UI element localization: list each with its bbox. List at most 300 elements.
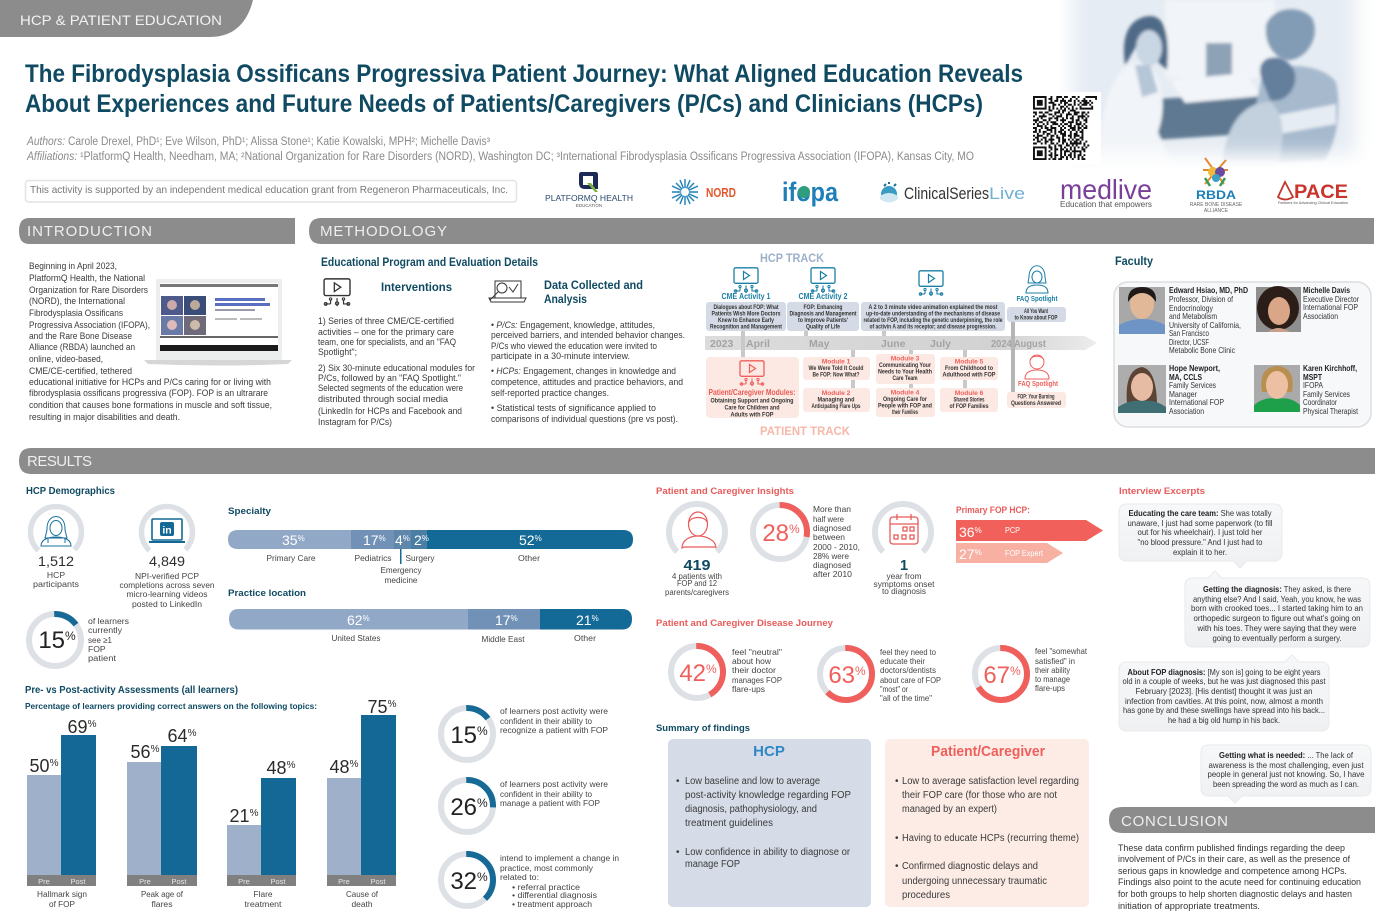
timeline arrow — [705, 336, 1097, 350]
box: video animation: of activin A and its receptor; and disease progression. — [870, 324, 997, 330]
text: Edward Hsiao: Metabolic Bone Clinic — [1169, 346, 1235, 355]
icon: laptop showing webinar — [144, 279, 292, 366]
stat: 26% confident manage: manage a patient with FOP — [500, 798, 600, 808]
box: module 4: their Families — [892, 409, 918, 416]
heading: pre vs post: Percentage of learners providing correct answers on the following topics: — [25, 701, 317, 711]
panel: summary patient caregiver: Having to educate HCPs (recurring theme) — [902, 833, 1079, 844]
box: module 1 — [803, 357, 870, 380]
logo: PACE: PACE — [1294, 182, 1348, 203]
stat: 67% somewhat satisfied: 67 — [983, 662, 1010, 689]
group: cause of death: % — [350, 759, 359, 770]
icon: animation video — [919, 271, 943, 296]
stat: 28% diagnosed after 2010: half were — [813, 514, 844, 524]
logo: RBDA — [1190, 158, 1243, 214]
box: module 6: Shared Stories — [954, 396, 985, 404]
text: Edward Hsiao: Endocrinology — [1169, 304, 1214, 313]
month labels: June — [881, 338, 906, 350]
stat: 15% currently see FOP: see ≥1 — [88, 635, 112, 645]
icon: doctor — [41, 516, 71, 546]
stat: 26% confident manage — [441, 779, 608, 832]
bar chart: specialty: 2 — [414, 532, 422, 548]
bar chart: practice location: % — [363, 614, 370, 623]
top tab: HCP & Patient Education — [0, 0, 253, 37]
box: FAQ HCP — [1007, 307, 1066, 322]
box: module 5: Adulthood with FOP — [942, 372, 996, 378]
stat: 1 year to diagnosis: to diagnosis — [882, 586, 926, 596]
quote bubble: getting the diagnosis: with his toes. They were saying that they were — [1197, 623, 1357, 633]
quote bubble: getting what is needed — [1201, 745, 1371, 803]
bar chart: practice location: 21 — [576, 612, 592, 628]
group: peak age: Pre — [139, 877, 151, 886]
heading: data collected — [544, 280, 643, 306]
panel: summary patient caregiver: • — [895, 861, 899, 872]
authors and affiliations — [26, 136, 974, 163]
text: Hope Newport: Family Services — [1169, 381, 1216, 390]
stat: 63% educate doctors: educate their — [880, 656, 925, 666]
stat: 28% diagnosed after 2010: 2000 - 2010, — [813, 542, 860, 552]
group: hallmark sign: Hallmark sign — [37, 889, 87, 899]
group: hallmark sign: Pre — [38, 877, 50, 886]
text: Hope Newport: International FOP — [1169, 398, 1224, 407]
text: Karen Kirchhoff: IFOPA — [1303, 381, 1323, 390]
box: module 5: From Childhood to — [945, 365, 993, 372]
stat: 15% currently see FOP — [29, 614, 129, 666]
heading: interview excerpts: Interview Excerpts — [1119, 486, 1205, 497]
arrow: 27% FOP expert: 27 — [959, 546, 975, 562]
quote bubble: educating the care team: out for his wheelchair). I just told her — [1138, 527, 1263, 537]
stat: 67% somewhat satisfied — [975, 646, 1088, 700]
logo: ClinicalSeriesLive: ClinicalSeries — [904, 185, 989, 203]
quote bubble: getting what is needed: awareness is the most challenging, even just — [1208, 760, 1364, 770]
text: Edward Hsiao: and Metabolism — [1169, 312, 1217, 321]
stat: 63% educate doctors — [820, 647, 941, 703]
text block: conclusion: involvement of P/Cs in their care, as well as the presence of — [1118, 854, 1350, 865]
month labels: July — [930, 338, 951, 350]
text block: introduction: (NORD), the International — [29, 296, 125, 306]
panel: summary patient caregiver: Low to average satisfaction level regarding — [902, 776, 1079, 787]
panel: summary HCP: Low confidence in ability to diagnose or — [685, 847, 851, 858]
bar chart: practice location: Middle East — [482, 634, 525, 644]
stat: HCP participants — [20, 496, 92, 589]
stat: 67% somewhat satisfied: feel "somewhat — [1035, 646, 1088, 656]
text: Edward Hsiao — [1169, 285, 1248, 355]
text block: data collected: • Statistical tests of significance applied to — [491, 403, 656, 413]
box: module 4: Module 4 — [891, 390, 920, 396]
bar chart: specialty: % — [379, 534, 386, 543]
text block: data collected: P/Cs who viewed the education were invited to — [491, 341, 657, 351]
stat: 419 patients and caregivers: 4 patients with — [672, 571, 722, 581]
stat: 42% neutral — [671, 646, 782, 698]
box: module 2 — [803, 388, 870, 412]
group: peak age: % — [188, 728, 197, 739]
stat: 419 patients and caregivers: 419 — [684, 558, 710, 574]
arrow: 36% PCP: 36 — [959, 524, 975, 540]
box: CME 1: Patients Wish More Doctors — [712, 310, 781, 318]
stat: 42% neutral: their doctor — [732, 665, 776, 675]
box: CME 2: Diagnosis and Management — [790, 310, 857, 318]
quote bubble: educating the care team: unaware, I just had some paperwork (to fill — [1128, 518, 1273, 528]
text: Edward Hsiao: Professor, Division of — [1169, 295, 1234, 304]
arrow: 36% PCP: % — [975, 526, 982, 535]
heading: specialty: Specialty — [228, 506, 272, 517]
bar chart: specialty: Primary Care — [266, 553, 316, 563]
text block: introduction: Fibrodysplasia Ossificans — [29, 308, 123, 318]
text block: interventions: 1) Series of three CME/CE-certified — [318, 316, 454, 326]
box: module 3: Communicating Your — [879, 362, 931, 369]
heading: pre vs post — [25, 685, 317, 711]
icon: video interventions — [324, 279, 350, 306]
text block: conclusion: initiation of appropriate treatments. — [1118, 901, 1260, 912]
stat: 15% currently see FOP: currently — [88, 625, 123, 635]
box: FAQ patient: Questions Answered — [1011, 400, 1061, 407]
logo: PlatformQ Health: EDUCATION — [576, 203, 602, 208]
box: module 4: People with FOP and — [878, 402, 932, 410]
box: FAQ patient — [1007, 392, 1066, 408]
stat: 419 patients and caregivers: FOP and 12 — [677, 578, 717, 588]
group: hallmark sign: % — [88, 719, 97, 730]
group: peak age: 64 — [168, 726, 188, 746]
box: module 1: Be FOP: Now What? — [812, 372, 860, 378]
icon: FAQ patient — [1025, 355, 1049, 379]
bar chart: specialty: 35 — [282, 532, 298, 548]
text block: introduction: Organization for Rare Disorders — [29, 285, 148, 295]
group: peak age: Post — [171, 877, 187, 886]
text: Michelle Davis: Michelle Davis — [1303, 285, 1350, 295]
text block: data collected: competence, attitudes and practice behaviors, and — [491, 377, 683, 387]
bar chart: specialty: 52 — [519, 532, 535, 548]
stat: 32% intend to change: • differential diagnosis — [512, 890, 597, 900]
quote bubble: getting the diagnosis: going to eventually perform a surgery. — [1212, 633, 1342, 643]
quote bubble: educating the care team: "no blood pressure." And I just had to — [1138, 537, 1263, 547]
panel: summary patient caregiver: Confirmed diagnostic delays and — [902, 861, 1038, 872]
logo: RBDA: RARE BONE DISEASE — [1190, 202, 1243, 208]
stat: 28% diagnosed after 2010: diagnosed — [813, 523, 851, 533]
stat: LinkedIn completions: completions across seven — [120, 580, 215, 590]
box: CME 2: FOP: Enhancing — [804, 304, 843, 311]
stat: HCP participants: HCP — [47, 570, 65, 580]
heading: FAQ Spotlight patient: FAQ Spotlight — [1018, 381, 1059, 388]
quote bubble: about FOP diagnosis: old in a couple of weeks, but he was just diagnosed this past — [1122, 676, 1326, 686]
heading: interventions: Interventions — [381, 282, 452, 294]
quote bubble: getting what is needed: people in general just not knowing. So, I have — [1208, 769, 1365, 779]
logo: medlive: Education that empowers — [1060, 200, 1152, 209]
box: module 2: Managing and — [818, 396, 855, 404]
stat: 32% intend to change: 32 — [450, 868, 477, 895]
bar chart: practice location: 17 — [495, 612, 511, 628]
panel: summary HCP: HCP — [753, 743, 785, 760]
heading: data collected: Data Collected and — [544, 280, 643, 292]
stat: 15% currently see FOP: % — [65, 629, 76, 643]
group: hallmark sign: Post — [70, 877, 86, 886]
month labels: 2024 August — [991, 338, 1046, 350]
text block: interventions: Spotlight"; — [318, 347, 357, 357]
text block: interventions: 2) Six 30-minute educational modules for — [318, 363, 475, 373]
stat: 15% confident recognize: recognize a patient with FOP — [500, 725, 608, 735]
box: module 3: Module 3 — [891, 356, 920, 362]
stat: 28% diagnosed after 2010: 28% were — [813, 551, 849, 561]
bar chart: specialty: 4 — [395, 532, 403, 548]
group: cause of death: Pre — [338, 877, 350, 886]
stat: LinkedIn completions — [120, 496, 215, 609]
quote bubble: educating the care team: explain it to her. — [1173, 547, 1227, 557]
box: module 3: Needs to Your Health — [878, 368, 932, 376]
photo: Edward Hsiao — [1119, 287, 1165, 334]
box: CME 1: Knew to Enhance Early — [718, 317, 774, 324]
text block: conclusion: serious gaps in knowledge and competence among HCPs. — [1118, 866, 1347, 877]
text block: data collected: self-reported practice changes. — [491, 388, 609, 398]
text block: introduction: CME/CE-certified, tethered — [29, 366, 132, 376]
box: video animation: related to FOP, including the genetic underpinning, the role — [864, 317, 1003, 324]
month labels: April — [746, 338, 770, 350]
box: module 4: Ongoing Care for — [883, 396, 927, 403]
panel: summary HCP: Low baseline and low to average — [685, 776, 820, 787]
icon: LinkedIn laptop: in — [162, 524, 172, 536]
box: module 2: Anticipating Flare Ups — [812, 403, 861, 410]
panel: summary patient caregiver: • — [895, 833, 899, 844]
section bar: Methodology: METHODOLOGY — [320, 223, 448, 240]
text block: introduction — [29, 261, 272, 422]
stat: 67% somewhat satisfied: their ability — [1035, 665, 1071, 675]
bar chart: practice location: % — [592, 614, 599, 623]
title: The Fibrodysplasia Ossificans Progressiva Patient Journey: What Aligned Education Reveals — [25, 60, 1023, 88]
bar chart: specialty: % — [298, 534, 305, 543]
QR code — [1033, 92, 1101, 160]
box: patient caregiver modules: Obtaining Support and Ongoing — [710, 398, 794, 404]
bar chart: specialty: % — [422, 534, 429, 543]
text block: introduction: online, video-based, — [29, 354, 103, 364]
group: peak age: Peak age of — [141, 889, 184, 899]
group: cause of death: Post — [370, 877, 386, 886]
text: Hope Newport — [1169, 363, 1224, 416]
box: module 6: Module 6 — [955, 390, 984, 397]
stat: LinkedIn completions: NPI-verified PCP — [135, 571, 199, 581]
stat: 32% intend to change — [441, 853, 619, 909]
box: CME 1: Dialogues about FOP: What — [714, 304, 779, 311]
logo: IFOPA: ifopa — [782, 177, 839, 207]
stat: 63% educate doctors: doctors/dentists — [880, 665, 936, 675]
heading: CME Activity 1: CME Activity 1 — [722, 291, 771, 301]
quote bubble: about FOP diagnosis: About FOP diagnosis: [My son is] going to be eight years — [1128, 667, 1320, 677]
group: hallmark sign: % — [50, 758, 59, 769]
text block: interventions: activities – one for the primary care — [318, 327, 454, 337]
icon: FAQ doctor — [1026, 266, 1048, 293]
stat: 15% confident recognize: % — [477, 724, 488, 738]
bar chart: specialty — [228, 530, 633, 585]
group: flare treatment: % — [287, 760, 296, 771]
logo: PlatformQ Health — [545, 172, 633, 208]
month labels: 2023 — [710, 338, 734, 350]
stat: 32% intend to change: • treatment approach — [512, 899, 592, 909]
panel: summary patient caregiver: • — [895, 776, 899, 787]
text: Edward Hsiao: Edward Hsiao, MD, PhD — [1169, 285, 1248, 295]
month labels — [710, 338, 1046, 350]
box: video animation — [861, 302, 1005, 331]
box: CME 1: Recognition and Management — [710, 324, 783, 330]
stat: HCP participants: 1,512 — [38, 553, 74, 569]
box: module 5: Module 5 — [955, 358, 984, 366]
bar chart: practice location: 62 — [347, 612, 363, 628]
section bar: Introduction: INTRODUCTION — [27, 223, 153, 240]
arrow: 27% FOP expert — [956, 543, 1063, 563]
box: CME 2: Quality of Life — [806, 324, 840, 330]
box: module 3 — [876, 354, 935, 384]
quote bubble: getting the diagnosis: orthopedic surgeon to figure out what's going on — [1194, 613, 1361, 623]
section bar: Methodology — [309, 218, 1374, 244]
group: hallmark sign: 50 — [30, 756, 50, 776]
quote bubble: getting what is needed: Getting what is needed: ... The lack of — [1219, 750, 1354, 760]
panel: summary patient caregiver: procedures — [902, 890, 950, 901]
stat: 28% diagnosed after 2010: % — [789, 522, 800, 536]
group: cause of death: Cause of — [346, 889, 379, 899]
text block: interventions — [318, 316, 475, 427]
section bar: Results — [19, 448, 1375, 474]
group: flare treatment: Flare — [254, 889, 273, 899]
logo: PACE — [1278, 182, 1348, 205]
text block: data collected: participate in a 30-minute interview. — [491, 351, 630, 361]
bar chart: pre vs post assessments — [27, 697, 397, 909]
section bar: Conclusion — [1109, 807, 1375, 833]
arrow: 27% FOP expert: % — [975, 548, 982, 557]
quote bubble: getting the diagnosis: born with crooked toes... I started taking him to an — [1191, 603, 1363, 613]
group: flare treatment: treatment — [244, 899, 282, 909]
panel: summary patient caregiver: managed by an expert) — [902, 804, 997, 815]
heading: primary FOP HCP: Primary FOP HCP: — [956, 505, 1030, 515]
group: peak age: 56 — [131, 742, 151, 762]
box: module 3: Care Team — [892, 375, 918, 382]
quote bubble: getting the diagnosis: Getting the diagnosis: They asked, is there — [1203, 584, 1351, 594]
heading: disease journey: Patient and Caregiver Disease Journey — [656, 618, 834, 629]
stat: 15% currently see FOP: patient — [88, 653, 117, 663]
box: module 6: of FOP Families — [950, 403, 989, 410]
bar chart: practice location: % — [511, 614, 518, 623]
panel: summary patient caregiver — [885, 739, 1089, 907]
stat: 32% intend to change: related to: — [500, 872, 539, 882]
panel: summary patient caregiver: Patient/Caregiver — [931, 743, 1045, 760]
group: peak age: flares — [152, 899, 172, 909]
text block: conclusion: These data confirm published findings regarding the deep — [1118, 843, 1345, 854]
text: Michelle Davis: Association — [1303, 312, 1338, 321]
box: patient caregiver modules: Care for Children and — [724, 404, 780, 412]
text block: conclusion — [1118, 843, 1361, 912]
bar chart: specialty: Other — [518, 553, 540, 563]
group: flare treatment: 21 — [230, 806, 250, 826]
box: video animation: up-to-date understanding of the mechanisms of disease — [866, 310, 1000, 318]
group: peak age — [127, 726, 197, 909]
stat: LinkedIn completions: micro-learning videos — [126, 589, 208, 599]
text block: interventions: team, one for specialists, and an "FAQ — [318, 337, 456, 347]
bar chart: practice location: United States — [332, 633, 380, 643]
panel: summary HCP: • — [676, 776, 680, 787]
group: flare treatment — [227, 758, 296, 909]
top tab: HCP & Patient Education: HCP & PATIENT EDUCATION — [20, 12, 222, 28]
heading: FAQ Spotlight HCP: FAQ Spotlight — [1016, 296, 1058, 303]
authors and affiliations: Affiliations: ¹PlatformQ Health, Needham, MA; ²National Organization for Rare Disorders (NORD), Washington DC; ³International Fibrodysplasia Ossificans Progressiva Association (IFOPA), Kansas City, MO — [26, 151, 974, 163]
box: CME 1 — [706, 302, 786, 331]
text block: conclusion: for both groups to help shorten diagnostic delays and hasten — [1118, 889, 1352, 900]
stat: 42% neutral: 42 — [679, 660, 706, 687]
text block: conclusion: Findings also point to the acute need for continuing education — [1118, 877, 1361, 888]
logo: RBDA: ALLIANCE — [1204, 208, 1229, 214]
text block: introduction: condition that causes bone formations in muscle and soft tissue, — [29, 400, 272, 410]
panel: summary HCP: treatment guidelines — [685, 818, 773, 829]
text block: interventions: P/Cs, followed by an "FAQ Spotlight." — [318, 373, 461, 383]
stat: 63% educate doctors: 63 — [828, 662, 855, 689]
text: Michelle Davis: International FOP — [1303, 303, 1358, 312]
text: Karen Kirchhoff — [1303, 363, 1359, 416]
stat: 15% currently see FOP: 15 — [38, 627, 65, 654]
group: cause of death: 75 — [368, 697, 388, 717]
text block: introduction: and the Rare Bone Disease — [29, 331, 132, 341]
text: Edward Hsiao: University of California, — [1169, 321, 1241, 330]
text block: interventions: distributed through social media — [318, 394, 448, 404]
group: hallmark sign — [27, 717, 97, 909]
icon: data laptop — [489, 281, 526, 302]
logo: medlive: medlive — [1060, 174, 1152, 205]
photo: Michelle Davis — [1256, 286, 1301, 332]
stat: 28% diagnosed after 2010: after 2010 — [813, 569, 852, 579]
heading: patient and caregiver insights: Patient and Caregiver Insights — [656, 486, 794, 497]
icon: CME activity 2 video — [811, 268, 835, 293]
title — [25, 60, 1023, 118]
stat: 63% educate doctors: about care of FOP — [880, 675, 941, 685]
text block: data collected: perceived barriers, and intended behavior changes. — [491, 330, 685, 340]
text block: introduction: educational initiative for HCPs and P/Cs caring for or living with — [29, 377, 271, 387]
bar chart: specialty: % — [403, 534, 410, 543]
stat: 67% somewhat satisfied: satisfied" in — [1035, 656, 1075, 666]
bar chart: specialty: Surgery — [406, 553, 435, 563]
quote bubble: about FOP diagnosis: he had a big old hump in his back. — [1168, 715, 1280, 725]
logo: NORD: NORD — [706, 185, 736, 200]
group: flare treatment: Pre — [238, 877, 250, 886]
quote bubble: getting the diagnosis — [1185, 571, 1370, 647]
heading: summary of findings: Summary of findings — [656, 723, 750, 734]
icon: calendar — [890, 514, 918, 544]
stat: LinkedIn completions: posted to LinkedIn — [132, 599, 202, 609]
background photo: doctor with parent and child — [1068, 0, 1360, 163]
stat: 63% educate doctors: % — [855, 664, 866, 678]
stat: 26% confident manage: % — [477, 796, 488, 810]
stat: 1 year to diagnosis: symptoms onset — [874, 579, 935, 589]
quote bubble: about FOP diagnosis: February [2023]. [His dentist] thought it was just an — [1136, 686, 1313, 696]
icon: CME activity 1 video — [734, 268, 758, 293]
heading: faculty: Faculty — [1115, 256, 1154, 268]
heading: HCP demographics: HCP Demographics — [26, 486, 115, 497]
heading: pre vs post: Pre- vs Post-activity Assessments (all learners) — [25, 685, 238, 696]
quote bubble: educating the care team — [1119, 504, 1282, 568]
arrow: 36% PCP — [956, 520, 1103, 541]
stat: 67% somewhat satisfied: to manage — [1035, 674, 1070, 684]
text block: introduction: resulting in major disabilities and death. — [29, 412, 180, 422]
text: Hope Newport: Association — [1169, 407, 1204, 416]
photo: Karen Kirchhoff — [1254, 365, 1300, 412]
text: Karen Kirchhoff: Family Services — [1303, 390, 1350, 399]
text block: interventions: (LinkedIn for HCPs and Facebook and — [318, 406, 462, 416]
stat: HCP participants: participants — [33, 579, 79, 589]
stat: 15% currently see FOP: FOP — [88, 644, 106, 654]
stat: 42% neutral: feel "neutral" — [732, 647, 782, 657]
group: flare treatment: % — [250, 808, 259, 819]
icon: person — [682, 512, 716, 548]
box: CME 2 — [787, 302, 859, 331]
group: cause of death — [327, 697, 397, 909]
timeline chart — [705, 251, 1097, 438]
quote bubble: about FOP diagnosis — [1119, 655, 1329, 731]
stat: 63% educate doctors: "most" or — [880, 684, 908, 694]
stat: 15% confident recognize: 15 — [450, 722, 477, 749]
bar chart: specialty: Pediatrics — [354, 553, 392, 563]
stat: 419 patients and caregivers: parents/caregivers — [665, 587, 729, 597]
group: flare treatment: Post — [270, 877, 286, 886]
